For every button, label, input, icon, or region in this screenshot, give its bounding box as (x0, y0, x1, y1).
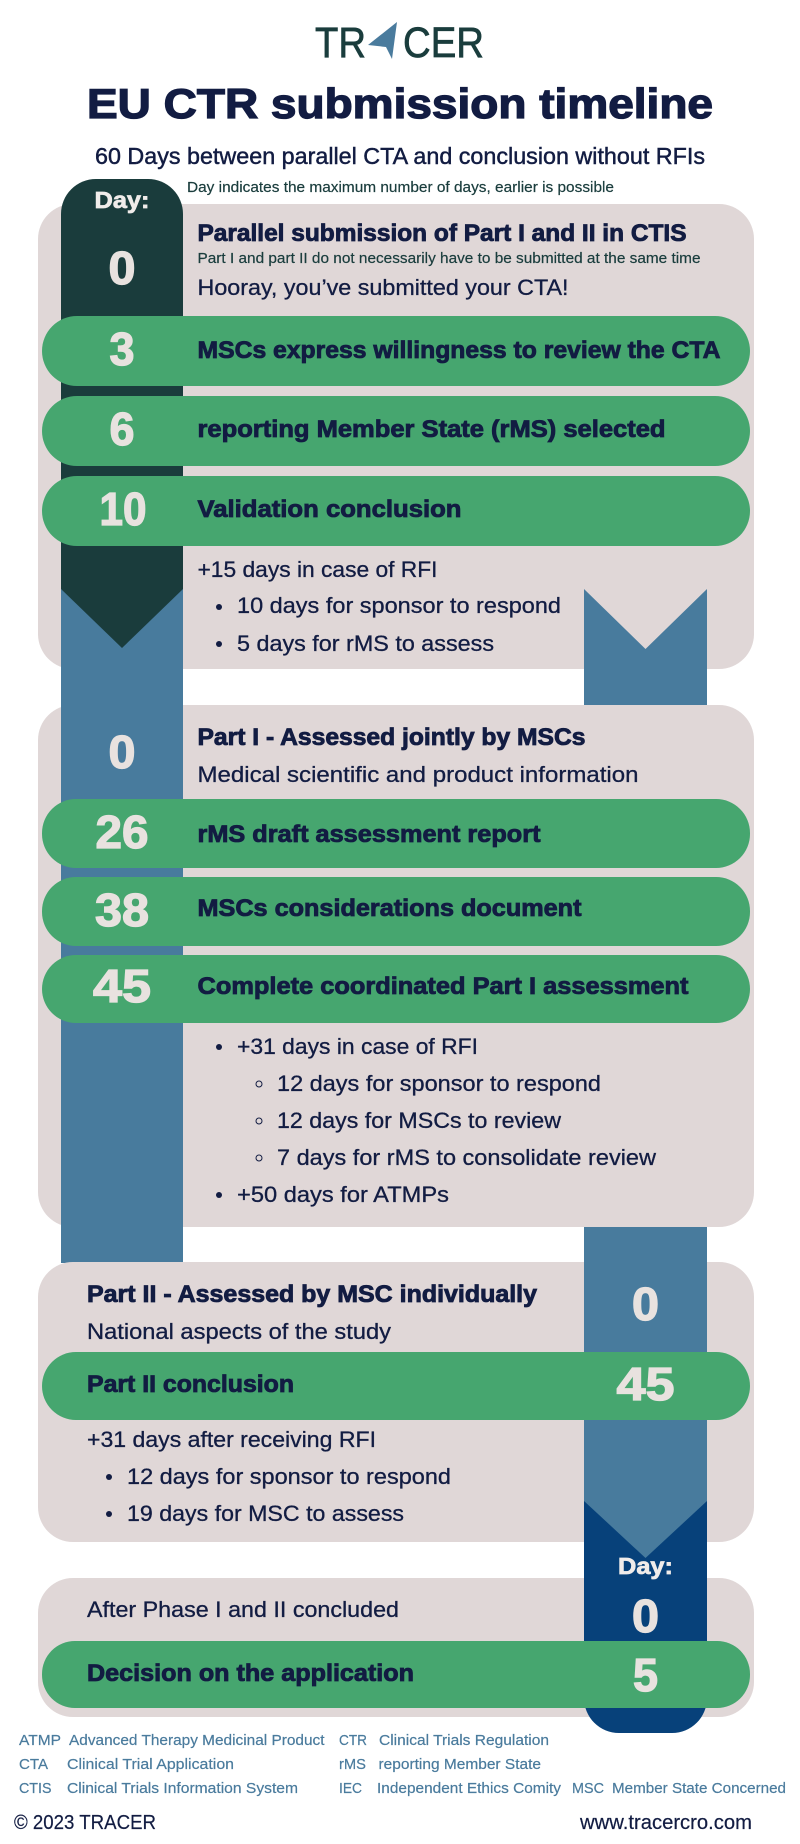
note: day meaning: Day indicates the maximum number of days, earlier is possible (187, 180, 614, 196)
right timeline: blue arrow (584, 1227, 707, 1558)
heading: Part II: Part II - Assessed by MSC individually (87, 1281, 537, 1308)
legend: abbreviations: Independent Ethics Comity (377, 1780, 561, 1797)
step: parallel submission (198, 220, 700, 300)
milestone: decision: 5 (633, 1649, 658, 1701)
milestone: day 38: MSCs considerations document (198, 895, 582, 922)
step: parallel submission: Part I and part II do not necessarily have to be submitted at the same time (198, 251, 700, 267)
footer: copyright: © 2023 TRACER (14, 1811, 156, 1834)
legend: abbreviations: CTIS (19, 1780, 52, 1797)
logo: TRACER: CER (403, 19, 484, 67)
heading: Part II (87, 1281, 537, 1344)
text block: Part I RFI: +50 days for ATMPs (237, 1182, 449, 1207)
day label: start: Day: (94, 187, 150, 213)
panel: Part I background (38, 705, 754, 1227)
milestone: day 10: Validation conclusion (198, 496, 462, 523)
text block: Part I RFI: 12 days for MSCs to review (277, 1108, 562, 1133)
legend: abbreviations: Clinical Trials Information System (67, 1780, 298, 1797)
heading: Part I (198, 724, 638, 787)
logo: TRACER: TR (315, 19, 366, 67)
day 0 decision: 0 (632, 1590, 659, 1642)
heading: Part I: Part I - Assessed jointly by MSCs (198, 724, 586, 751)
day 0 Part II: 0 (632, 1278, 659, 1330)
milestone: Part II conclusion (42, 1352, 750, 1420)
legend: abbreviations: MSC (572, 1780, 604, 1797)
text block: validation RFI: 5 days for rMS to assess (237, 631, 494, 656)
left timeline: dark arrow (61, 179, 183, 648)
milestone: day 6 (42, 396, 750, 466)
milestone: day 3: 3 (110, 323, 134, 375)
footer: website: www.tracercro.com (579, 1811, 752, 1834)
text block: Part I RFI: 12 days for sponsor to respond (277, 1071, 601, 1096)
legend: abbreviations: Member State Concerned (612, 1780, 786, 1797)
milestone: day 45: 45 (93, 960, 151, 1012)
right timeline: blue segment with notch (584, 589, 707, 705)
milestone: decision: Decision on the application (87, 1660, 414, 1687)
milestone: day 45: Complete coordinated Part I assessment (198, 973, 688, 1000)
milestone: day 45 (42, 955, 750, 1023)
title: EU CTR submission timeline (87, 80, 713, 127)
text block: Part II RFI: 12 days for sponsor to respond (127, 1464, 451, 1489)
milestone: day 3 (42, 316, 750, 386)
legend: abbreviations: Clinical Trial Application (67, 1756, 234, 1773)
text block: validation RFI (198, 557, 561, 656)
text block: Part II RFI (87, 1427, 451, 1526)
heading: Part I: Medical scientific and product information (198, 762, 638, 787)
text: after phases concluded: After Phase I and II concluded (87, 1597, 399, 1622)
right timeline: navy arrow end (584, 1501, 707, 1733)
milestone: day 26 (42, 799, 750, 868)
legend: abbreviations (19, 1732, 786, 1797)
milestone: day 3: MSCs express willingness to review the CTA (198, 337, 721, 364)
subtitle: 60 Days between parallel CTA and conclusion without RFIs (95, 143, 705, 169)
milestone: Part II conclusion: 45 (616, 1358, 674, 1410)
text block: Part II RFI: +31 days after receiving RFI (87, 1427, 376, 1452)
panel: Part II background (38, 1262, 754, 1542)
legend: abbreviations: IEC (339, 1780, 362, 1797)
panel: decision background (38, 1578, 754, 1717)
text block: validation RFI: +15 days in case of RFI (198, 557, 438, 582)
legend: abbreviations: rMS (339, 1756, 366, 1773)
legend: abbreviations: ATMP (19, 1732, 61, 1749)
legend: abbreviations: Clinical Trials Regulation (379, 1732, 549, 1749)
milestone: day 26: rMS draft assessment report (198, 821, 540, 848)
milestone: day 38: 38 (95, 884, 149, 936)
logo: TRACER (315, 19, 484, 67)
day 0 Part I: 0 (108, 726, 136, 778)
text block: Part I RFI: +31 days in case of RFI (237, 1034, 478, 1059)
legend: abbreviations: CTA (19, 1756, 48, 1773)
panel: validation background (38, 204, 754, 669)
milestone: decision (42, 1641, 750, 1708)
day label: decision: Day: (618, 1553, 673, 1579)
milestone: day 10 (42, 476, 750, 546)
milestone: day 6: 6 (110, 403, 134, 455)
milestone: Part II conclusion: Part II conclusion (87, 1371, 294, 1398)
legend: abbreviations: Advanced Therapy Medicinal Product (69, 1732, 325, 1749)
text block: Part II RFI: 19 days for MSC to assess (127, 1501, 404, 1526)
legend: abbreviations: CTR (339, 1732, 367, 1749)
left timeline: blue segment (61, 580, 183, 1263)
step: parallel submission: Parallel submission of Part I and II in CTIS (198, 220, 686, 247)
text block: Part I RFI: 7 days for rMS to consolidate review (277, 1145, 657, 1170)
milestone: day 38 (42, 877, 750, 946)
day 0 submission: 0 (108, 242, 136, 294)
milestone: day 6: reporting Member State (rMS) selected (198, 416, 666, 443)
step: parallel submission: Hooray, you’ve submitted your CTA! (198, 275, 568, 300)
heading: Part II: National aspects of the study (87, 1319, 392, 1344)
text block: validation RFI: 10 days for sponsor to respond (237, 593, 561, 618)
milestone: day 26: 26 (96, 806, 148, 858)
text block: Part I RFI (216, 1034, 657, 1207)
milestone: day 10: 10 (100, 483, 146, 535)
legend: abbreviations: reporting Member State (378, 1756, 541, 1773)
